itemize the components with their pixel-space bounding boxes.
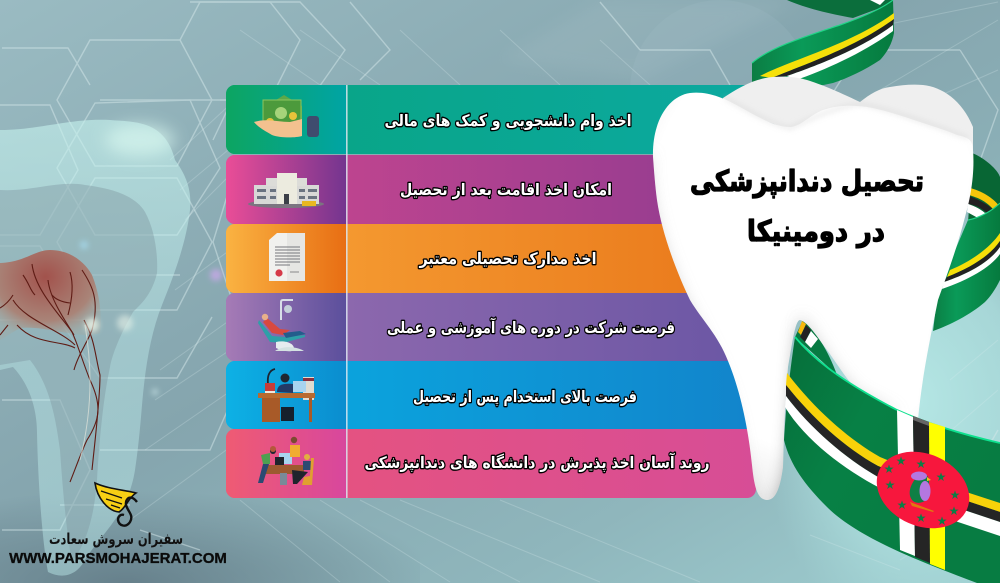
flag emblem: red disc with parrot and stars: ★	[885, 478, 895, 492]
icon: group at table	[258, 437, 314, 485]
list of six benefits	[226, 85, 756, 498]
row 2 text: امکان اخذ اقامت بعد از تحصیل	[400, 180, 612, 199]
ghost tooth illustration	[0, 120, 222, 576]
parrot	[910, 472, 934, 512]
row 2: residency after study	[226, 155, 756, 224]
website url: WWW.PARSMOHAJERAT.COM	[9, 550, 227, 567]
title on tooth	[690, 164, 924, 248]
row 6: easy admission	[226, 429, 756, 498]
row 5 text: فرصت بالای استخدام پس از تحصیل	[413, 387, 637, 407]
flag emblem: red disc with parrot and stars: ★	[916, 457, 926, 471]
row 3: valid certificates	[226, 224, 756, 293]
flag emblem: red disc with parrot and stars: ★	[950, 488, 960, 502]
title on tooth: تحصیل دندانپزشکی	[690, 164, 924, 199]
flag emblem: red disc with parrot and stars: ★	[897, 498, 907, 512]
vertical divider	[346, 85, 348, 498]
flag emblem: red disc with parrot and stars	[865, 438, 981, 542]
ribbon: upper strand	[752, 0, 894, 100]
row 1 text: اخذ وام دانشجویی و کمک های مالی	[384, 111, 632, 130]
logo wing and S mark	[95, 483, 137, 526]
flag emblem: red disc with parrot and stars: ★	[916, 511, 926, 525]
tooth	[652, 76, 974, 500]
icon: university building	[248, 173, 324, 208]
flag emblem: red disc with parrot and stars: ★	[937, 514, 947, 528]
title on tooth: در دومینیکا	[747, 214, 885, 248]
row 1: loans and financial aid	[226, 85, 756, 154]
logo persian name: سفیران سروش سعادت	[49, 530, 183, 548]
icon: hand holding money	[254, 95, 319, 137]
flag emblem: red disc with parrot and stars: ★	[949, 504, 959, 518]
row 3 text: اخذ مدارک تحصیلی معتبر	[419, 249, 596, 268]
row 4 text: فرصت شرکت در دوره های آموزشی و عملی	[387, 317, 675, 337]
flag emblem: red disc with parrot and stars: ★	[936, 470, 946, 484]
icon: dental chair	[258, 300, 306, 351]
row 5: employment	[226, 361, 756, 429]
icon: person at desk	[258, 369, 315, 422]
row 4: training courses	[226, 293, 756, 361]
ribbon: back strands	[787, 0, 1000, 375]
logo	[9, 483, 227, 567]
ribbon: right strand	[933, 203, 1000, 331]
flag emblem: red disc with parrot and stars: ★	[896, 454, 906, 468]
ribbon: lower band with flag of Dominica	[784, 337, 1000, 583]
flag emblem: red disc with parrot and stars: ★	[884, 462, 894, 476]
row 6 text: روند آسان اخذ پذیرش در دانشگاه های دندانپزشکی	[364, 452, 710, 473]
icon: document	[269, 233, 305, 281]
